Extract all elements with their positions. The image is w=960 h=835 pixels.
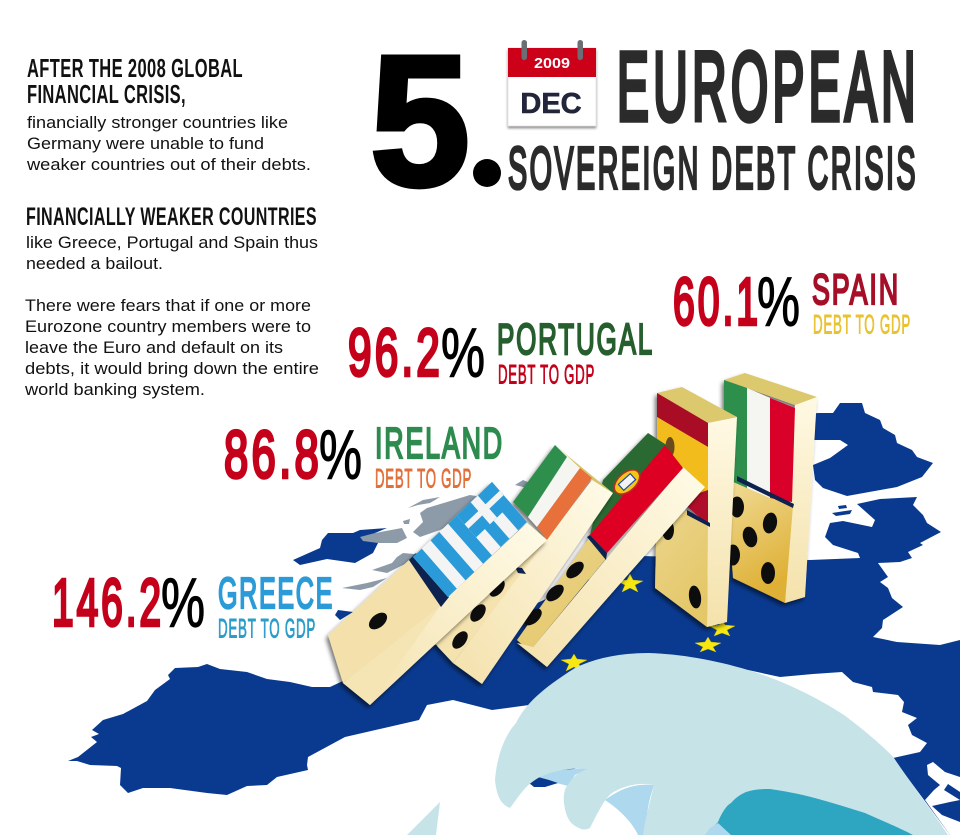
stat: Greece 146.2%: DEBT TO GDP	[218, 614, 316, 644]
domino: Italy	[724, 373, 817, 603]
heading: after the 2008 global financial crisis: FINANCIAL CRISIS,	[27, 79, 186, 109]
main landmass	[68, 497, 960, 835]
domino: Greece	[328, 482, 547, 705]
heading: after the 2008 global financial crisis: AFTER THE 2008 GLOBAL	[27, 53, 243, 83]
text block: bailout: needed a bailout.	[26, 255, 163, 273]
right side white coast	[925, 762, 960, 835]
stat: Spain 60.1%: 60.1	[673, 264, 761, 340]
icon: calendar 2009 Dec: 2009	[534, 55, 570, 72]
text block: fears: leave the Euro and default on its	[25, 339, 283, 357]
domino: Ireland	[425, 444, 613, 684]
icon: calendar 2009 Dec: DEC	[520, 88, 582, 120]
stat: Greece 146.2%: %	[161, 564, 205, 642]
text block: fears: world banking system.	[24, 381, 205, 399]
wave	[407, 653, 948, 835]
text block: fears: debts, it would bring down the entire	[25, 360, 319, 378]
title: European sovereign debt crisis	[508, 32, 920, 202]
heading: after the 2008 global financial crisis	[27, 53, 243, 109]
stat: Portugal 96.2%	[348, 314, 654, 392]
stat: Ireland 86.8%: %	[319, 416, 362, 494]
Ireland blue	[293, 528, 387, 565]
northern landmass	[760, 403, 933, 496]
stat: Portugal 96.2%: %	[441, 314, 485, 392]
text block: stronger countries: Germany were unable to fund	[27, 135, 264, 153]
stat: Ireland 86.8%: IRELAND	[375, 419, 504, 468]
stat: Greece 146.2%: GREECE	[218, 569, 334, 618]
pale left crest fragment	[407, 802, 440, 835]
Greek flag	[413, 482, 527, 597]
stat: Portugal 96.2%: 96.2	[348, 316, 443, 390]
stat: Spain 60.1%: SPAIN	[812, 266, 900, 314]
heading: financially weaker countries: FINANCIALLY WEAKER COUNTRIES	[26, 203, 317, 231]
number five: 5	[370, 18, 470, 225]
text block: stronger countries	[26, 114, 311, 174]
stat: Greece 146.2%	[52, 564, 334, 644]
stat: Ireland 86.8%: DEBT TO GDP	[375, 464, 472, 494]
stat: Ireland 86.8%: 86.8	[224, 418, 322, 492]
stars	[561, 574, 735, 671]
grey islands	[360, 528, 407, 543]
stat: Portugal 96.2%: DEBT TO GDP	[498, 360, 595, 390]
text block: fears	[24, 297, 319, 399]
stat: Ireland 86.8%	[224, 416, 504, 494]
stat: Spain 60.1%	[673, 262, 911, 340]
text block: stronger countries: weaker countries out of their debts.	[26, 156, 311, 174]
stat: Spain 60.1%: %	[757, 262, 800, 340]
small islands	[838, 505, 847, 509]
stat: Portugal 96.2%: PORTUGAL	[497, 315, 654, 364]
domino: Portugal	[517, 433, 705, 667]
stat: Greece 146.2%: 146.2	[52, 566, 164, 640]
text block: stronger countries: financially stronger countries like	[27, 114, 288, 132]
map of Europe	[68, 403, 960, 835]
text block: fears: There were fears that if one or more	[25, 297, 311, 315]
text block: fears: Eurozone country members were to	[25, 318, 311, 336]
text block: bailout: like Greece, Portugal and Spain thus	[26, 234, 318, 252]
icon: calendar 2009 Dec	[508, 40, 596, 126]
text block: bailout	[26, 234, 318, 273]
icon: Portuguese crest	[610, 465, 644, 499]
domino: Spain	[655, 387, 737, 627]
